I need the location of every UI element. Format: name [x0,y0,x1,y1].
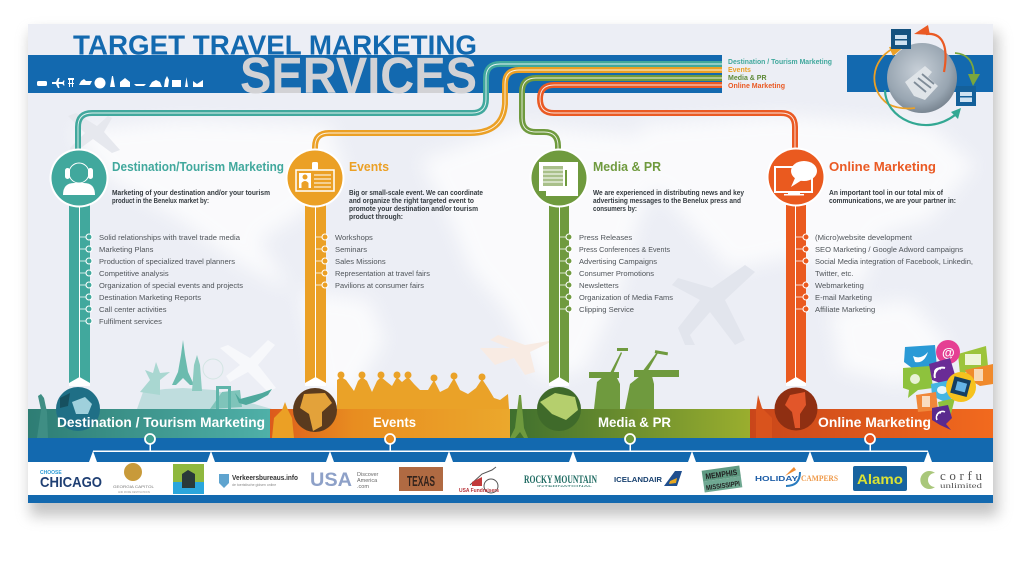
silhouette: crowd [337,372,509,409]
connector lines and pins [89,434,932,462]
bullet list [796,233,973,314]
logo strip [28,462,993,495]
logo: USA Fundraisers [459,467,499,494]
icon circle: headset person [50,148,108,208]
bullet list: Destination Marketing Reports [99,293,201,302]
vertical bar [786,205,806,386]
intro text: We are experienced in distributing news and key [593,190,744,197]
logo: gold shell: GEORGIA CAPITOL [113,484,155,489]
legend [728,59,832,90]
intro text [829,190,956,205]
top blue band left [28,55,722,93]
bullet list: Marketing Plans [99,245,154,254]
bullet list: Production of specialized travel planners [99,257,235,266]
logo: Chicago: CHOOSE [40,470,62,476]
intro text [112,190,270,205]
logo: Icelandair: ICELANDAIR [614,477,662,484]
logos [40,463,982,494]
logo: gold shell: AND MORE DESTINATIONS [118,490,150,494]
route: online marketing [540,85,795,152]
bullet list: Clipping Service [579,305,634,314]
intro text: Big or small-scale event. We can coordinate [349,190,483,197]
icon: web box top [891,29,911,49]
logo: Verkeersbureaus [219,473,298,488]
icon circle: newspaper [530,148,588,208]
globe: media [537,387,581,431]
globe with handshake and arrows [874,25,980,125]
bullet list: Seminars [335,245,367,254]
logo: Alamo [853,466,907,491]
bullet list: Competitive analysis [99,269,169,278]
logo: Texas: TEXAS [407,473,435,490]
bullet list: Sales Missions [335,257,386,266]
logo: Memphis Mississippi: MEMPHIS [705,468,738,481]
logo: Holiday Campers: HOLIDAY [755,474,798,483]
bullet list [315,233,430,290]
social media bubbles: @ [942,345,955,360]
intro text: Marketing of your destination and/or your tourism [112,190,270,197]
logo: Texas [399,467,443,491]
heading: Destination/Tourism Marketing [112,159,284,174]
bullet list: Social Media integration of Facebook, Linkedin, [815,257,973,266]
bullet list: Affiliate Marketing [815,305,875,314]
logo: Holiday Campers: CAMPERS [801,473,838,483]
colored bands [28,409,993,438]
bullet list [79,233,243,326]
globe: events [293,388,337,432]
bullet list: Organization of special events and projects [99,281,243,290]
logo: Memphis Mississippi [702,465,742,493]
band labels: Online Marketing [818,414,931,430]
social media bubbles [903,340,993,430]
icon circle: monitor and speech bubble [766,148,826,206]
bullet list: Consumer Promotions [579,269,654,278]
intro text: product through: [349,214,403,221]
legend: Destination / Tourism Marketing [728,59,832,66]
bullet list: Press Conferences & Events [579,245,670,254]
intro text: promote your destination and/or tourism [349,206,478,213]
faint planes [68,113,755,392]
bullet list: Twitter, etc. [815,269,853,278]
band labels: Destination / Tourism Marketing [57,414,265,430]
bullet list: Organization of Media Fams [579,293,673,302]
intro text: consumers by: [593,206,637,213]
logo: Discover America: Discover [357,472,379,478]
bottom blue strip [28,495,993,503]
top blue band right [847,55,993,92]
logo: Rocky Mountain: INTERNATIONAL [537,484,593,488]
title: TARGET TRAVEL MARKETING [73,30,477,60]
bullet list: Webmarketing [815,281,864,290]
heading: Events [349,159,389,174]
logo: Verkeersbureaus: de toeristische gidsen online [232,483,276,487]
arrow: teal [885,90,955,125]
bullet list: Call center activities [99,305,167,314]
column: online [766,148,973,386]
logo: green square [173,464,204,494]
intro text: communications, we are your partner in: [829,198,956,205]
legend: Events [728,67,751,74]
route lines [78,64,795,152]
silhouette: tourism landmarks [137,340,272,409]
intro text: and organize the right targeted event to [349,198,474,205]
bullet list: Representation at travel fairs [335,269,430,278]
logo: Rocky Mountain: ROCKY MOUNTAIN [524,472,597,486]
vertical bar [69,205,90,386]
heading: Online Marketing [829,159,936,174]
arrow: green [955,53,974,76]
intro text: advertising messages to the Benelux press and [593,198,741,205]
route: events [315,70,722,152]
landmark silhouettes on bands [37,394,772,438]
icon: web box right [956,86,976,106]
silhouette: camera crew [589,348,679,409]
logo: Icelandair [614,471,682,486]
heading: Media & PR [593,159,662,174]
vertical bar [549,205,569,386]
logo: Memphis Mississippi: MISSISSIPPI [706,481,740,492]
logo: Verkeersbureaus: Verkeersbureaus.info [232,473,298,482]
bullet list: Workshops [335,233,373,242]
intro text: An important tool in our total mix of [829,190,944,197]
logo: Corfu Unlimited: unlimited [940,481,982,490]
bullet list: Press Releases [579,233,632,242]
background panel with world map [28,24,993,503]
route: destination [78,64,722,152]
legend: Online Marketing [728,83,785,90]
bullet list: Fulfilment services [99,317,162,326]
logo: Corfu Unlimited: corfu [940,468,982,483]
logo: Corfu Unlimited [920,468,982,490]
column: events [286,148,483,386]
band labels: Media & PR [598,414,671,430]
bullet list: (Micro)website development [815,233,913,242]
logo: Rocky Mountain [524,472,597,488]
panel shadow [30,32,998,516]
logo: Chicago: CHICAGO [40,474,102,491]
bullet list: E-mail Marketing [815,293,872,302]
logo: gold shell [113,463,155,494]
bullet list: SEO Marketing / Google Adword campaigns [815,245,963,254]
icon: handshake [905,66,938,100]
bullet list: Solid relationships with travel trade media [99,233,241,242]
logo: USA Fundraisers: USA Fundraisers [459,488,499,494]
column: media [530,148,744,386]
column: destination [50,148,284,386]
icon circle: badge [286,148,344,208]
intro text [349,190,483,221]
bullet list: Advertising Campaigns [579,257,657,266]
arrow: red [926,34,946,72]
logo: Discover America [310,470,379,491]
logo: Discover America: USA [310,470,352,491]
lower blue strip [28,438,993,462]
icon row: travel icons [37,76,203,88]
band labels: Events [373,414,416,430]
subtitle SERVICES: SERVICES [240,47,477,104]
logo: Discover America: America [357,478,378,484]
legend: Media & PR [728,75,767,82]
logo: Discover America: .com [357,484,369,490]
bullet list: Newsletters [579,281,619,290]
globe: online [774,388,818,430]
intro text: product in the Benelux market by: [112,198,209,205]
arrow: orange [874,48,915,108]
logo: Alamo: Alamo [857,471,903,487]
bullet list [559,233,673,314]
route: media [522,78,722,152]
globe: destination [56,387,100,431]
band labels [57,414,931,430]
bullet list: Pavilions at consumer fairs [335,281,424,290]
vertical bar [305,205,326,386]
logo: Holiday Campers [755,467,838,486]
intro text [593,190,744,213]
